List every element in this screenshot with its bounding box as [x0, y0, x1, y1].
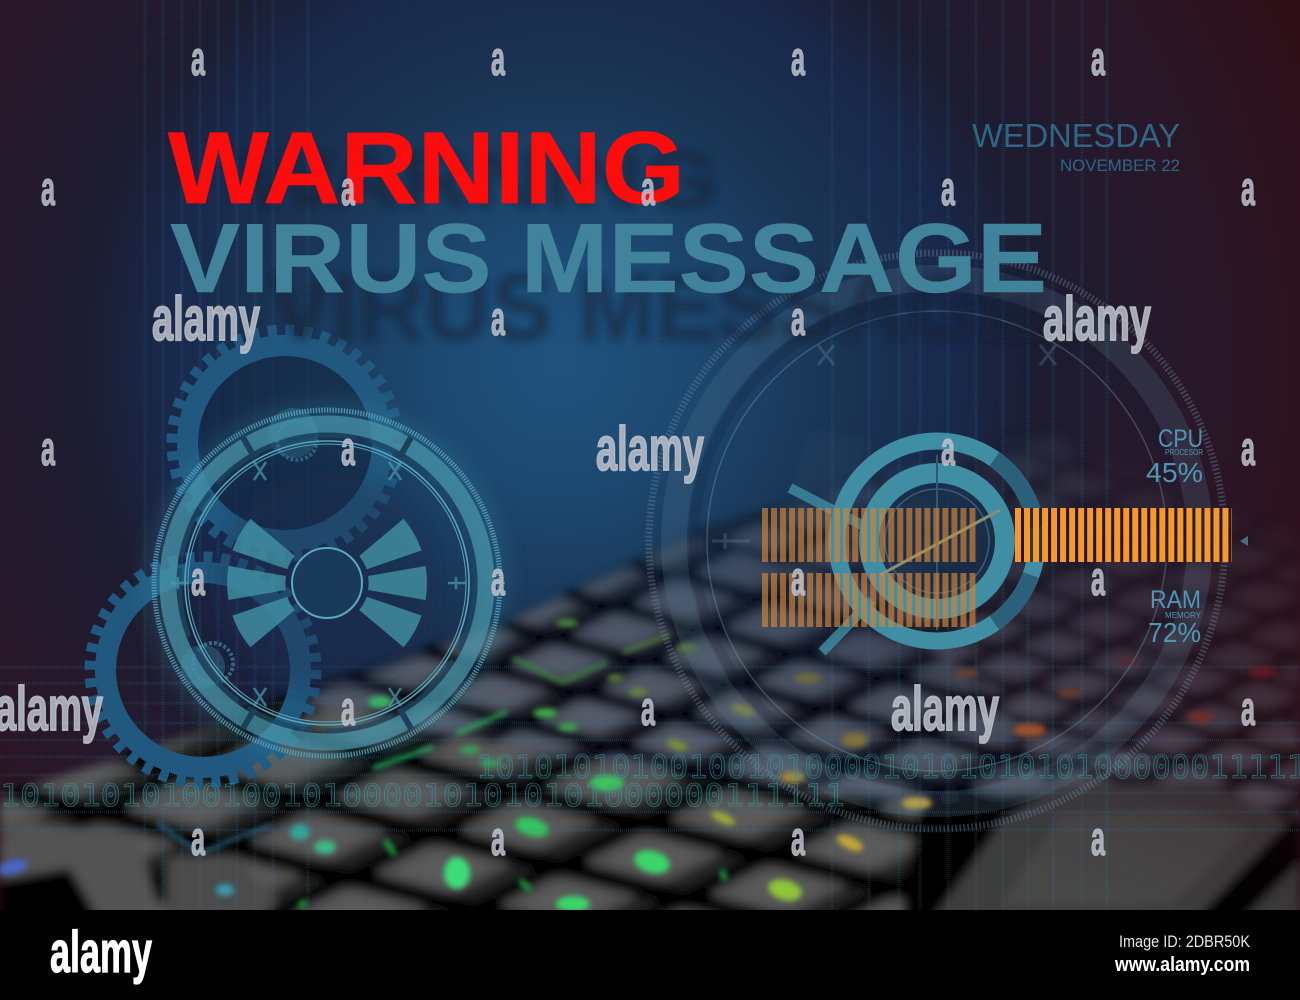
watermark: small a tiles: a [1091, 813, 1105, 866]
footer url: www.alamy.com [1114, 954, 1250, 976]
watermark: small a tiles: a [791, 813, 805, 866]
orange bars: left top (CPU) [762, 508, 978, 562]
watermark: small a tiles: a [1241, 163, 1255, 216]
watermark: small a tiles: a [41, 423, 55, 476]
watermark: small a tiles: a [1091, 553, 1105, 606]
watermark: alamy wordmarks: alamy [891, 675, 999, 744]
watermark: small a tiles: a [341, 683, 355, 736]
title shadow: VIRUS MESSAGE [270, 254, 1040, 361]
footer image id: Image ID: 2DBR50K [1119, 932, 1251, 951]
date block: NOVEMBER 22 [1060, 156, 1180, 175]
watermark: alamy wordmarks: alamy [1043, 285, 1151, 354]
watermark: small a tiles: a [941, 163, 955, 216]
watermark: small a tiles: a [1241, 423, 1255, 476]
right HUD ring (center) [790, 441, 1037, 652]
watermark: small a tiles: a [491, 33, 505, 86]
watermark: small a tiles: a [941, 423, 955, 476]
watermark: small a tiles: a [641, 163, 655, 216]
key backlight glyphs [0, 619, 1277, 912]
right HUD dial (faint large) [649, 253, 1248, 829]
RAM stat: MEMORY [1165, 611, 1202, 620]
orange bars: right [1015, 508, 1232, 562]
watermark: small a tiles: a [1241, 683, 1255, 736]
watermark: small a tiles: a [191, 813, 205, 866]
arrow marker [1240, 536, 1248, 546]
watermark: small a tiles: a [341, 163, 355, 216]
watermark: small a tiles: a [641, 683, 655, 736]
dial hub [292, 548, 362, 618]
watermark: small a tiles [41, 33, 1255, 866]
CPU stat: 45% [1146, 457, 1203, 488]
dial tick crosses [170, 462, 505, 706]
CPU stat: CPU [1158, 425, 1203, 453]
watermark: small a tiles: a [491, 553, 505, 606]
watermark: small a tiles: a [491, 293, 505, 346]
footer band [0, 910, 1300, 1000]
orange bars: left bottom (RAM) [762, 573, 978, 627]
small inner gear bottom [181, 643, 233, 689]
dial blades [227, 519, 427, 647]
RAM stat [1148, 586, 1202, 648]
watermark: small a tiles: a [1091, 33, 1105, 86]
gear: bottom [91, 558, 315, 782]
footer alamy logo: alamy [50, 920, 152, 985]
watermark: alamy wordmarks [0, 285, 1151, 744]
watermark: alamy wordmarks: alamy [596, 415, 704, 484]
small inner gear top [268, 408, 318, 460]
left HUD dial [154, 410, 505, 756]
watermark: small a tiles: a [791, 293, 805, 346]
title: WARNING: WARNING [168, 111, 685, 225]
date block [972, 117, 1180, 175]
gear: top [173, 331, 397, 555]
keyboard photo [0, 458, 1300, 910]
watermark: small a tiles: a [791, 553, 805, 606]
title: VIRUS MESSAGE: VIRUS MESSAGE [170, 203, 1047, 313]
title shadow: WARNING [240, 135, 720, 224]
watermark: small a tiles: a [191, 33, 205, 86]
title shadow [240, 135, 1040, 361]
dial clamps [243, 438, 411, 728]
binary code row 2: 101010101001001010000101010101000000111111 [0, 778, 845, 814]
watermark: small a tiles: a [41, 163, 55, 216]
binary code row 1: 1010101010010010100001010101010100000011111 [476, 748, 1300, 786]
RAM stat: RAM [1150, 586, 1201, 614]
watermark: small a tiles: a [191, 553, 205, 606]
watermark: alamy wordmarks: alamy [152, 285, 260, 354]
RAM stat: 72% [1148, 617, 1201, 648]
watermark: small a tiles: a [341, 423, 355, 476]
CPU stat [1146, 425, 1203, 488]
CPU stat: PROCESOR [1165, 448, 1203, 457]
watermark: alamy wordmarks: alamy [0, 675, 103, 744]
watermark: small a tiles: a [491, 813, 505, 866]
watermark: small a tiles: a [791, 33, 805, 86]
date block: WEDNESDAY [972, 117, 1180, 154]
